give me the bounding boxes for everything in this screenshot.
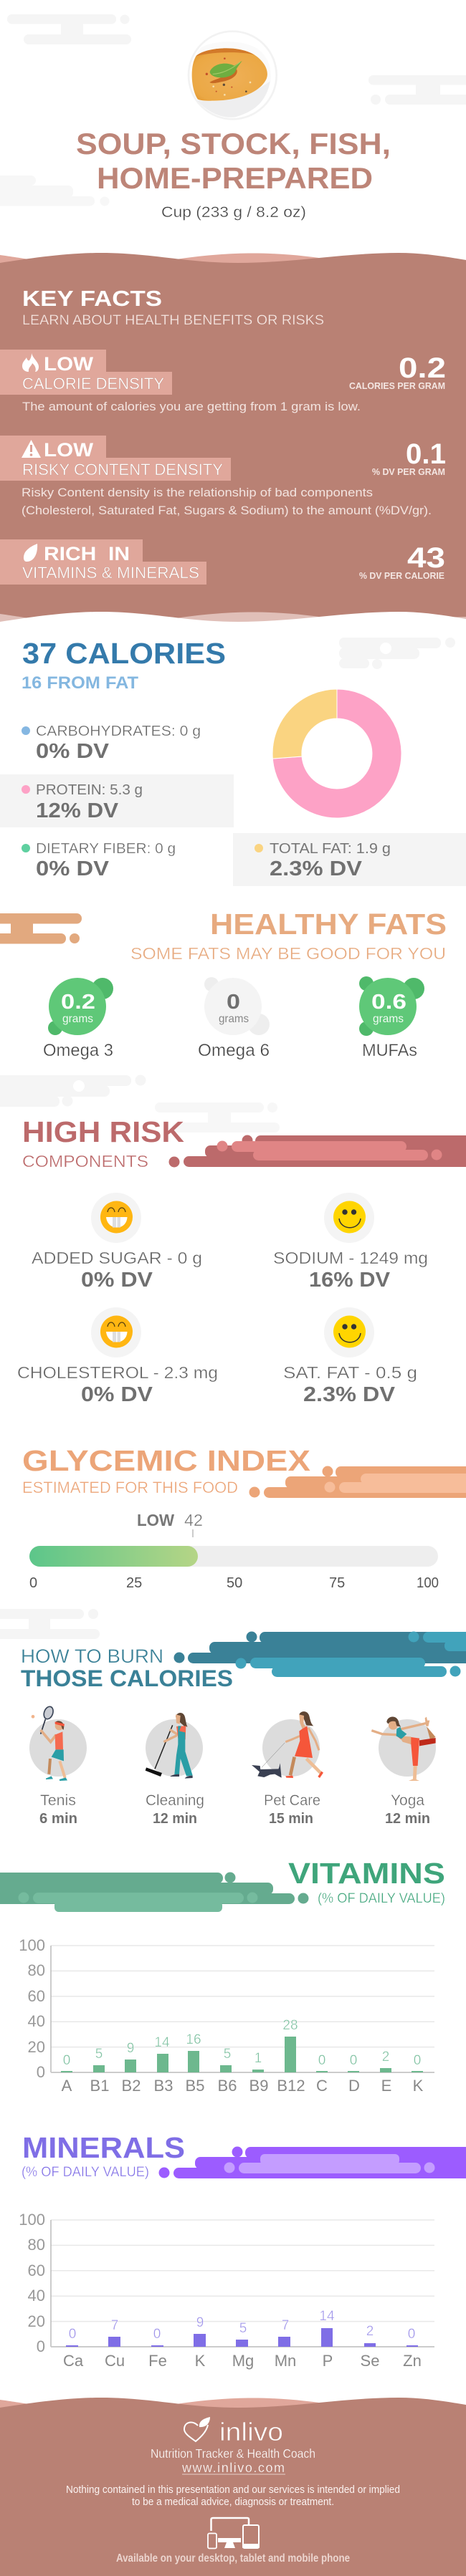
bar chart: vitamins: 9 [127,2041,134,2056]
bar chart: minerals: 20 [28,2312,45,2330]
component: sodium: SODIUM - 1249 mg [273,1249,428,1267]
decorative banner: burn calories [173,1632,466,1677]
bar chart: vitamins: 0 [63,2053,70,2068]
fat: omega 3 [43,978,113,1060]
fact: risky content density: 0.1 [406,438,446,470]
bar chart: minerals [19,2211,434,2370]
bar chart: minerals: Mn [275,2352,296,2370]
background cloud: top left [7,14,131,44]
bar chart: minerals: 80 [28,2236,45,2254]
nutrient: carbohydrates: CARBOHYDRATES: 0 g [36,724,201,739]
activity: pet care: 15 min [269,1811,313,1827]
bar chart: minerals: 0 [153,2327,161,2342]
nutrient: dietary fiber: DIETARY FIBER: 0 g [36,841,176,857]
bar chart: minerals: 40 [28,2287,45,2305]
glycemic marker label: 42 [184,1511,203,1529]
background cloud: burn calories [0,1609,100,1639]
bar chart: minerals: K [195,2352,206,2370]
glycemic index subheading: ESTIMATED FOR THIS FOOD [22,1479,238,1496]
high risk heading: HIGH RISK [22,1115,184,1148]
activity: cleaning: 12 min [153,1811,197,1827]
glycemic scale: 75 [329,1575,345,1591]
bar chart: vitamins: B3 [154,2077,173,2095]
fact: rich in vitamins and minerals: VITAMINS & MINERALS [22,564,199,582]
bar chart: vitamins: 100 [19,1936,45,1954]
healthy fats heading: HEALTHY FATS [210,908,447,941]
fact: calorie density [0,350,446,413]
bar chart: minerals: Zn [403,2352,422,2370]
glycemic scale: 0 [29,1575,37,1591]
fat: MUFAs [359,976,424,1060]
bar chart: minerals: 7 [111,2318,118,2333]
panel: calories [0,637,466,886]
title [76,127,391,195]
nutrient: total fat: 2.3% DV [270,857,363,880]
disclaimer: Nothing contained in this presentation and our services is intended or implied [66,2484,400,2496]
bar chart: vitamins: 2 [382,2049,389,2065]
fact: risky content density: LOW [44,439,94,461]
icon: flame [22,353,39,372]
fact: calorie density: LOW [44,353,94,375]
bar chart: minerals: P [323,2352,333,2370]
background cloud: top right [368,75,466,105]
minerals heading: MINERALS [22,2131,185,2164]
decorative banner: minerals [159,2146,466,2178]
serving size: Cup (233 g / 8.2 oz) [161,204,306,221]
fat: MUFAs: grams [373,1013,404,1025]
key facts heading: KEY FACTS [22,286,162,311]
component: added sugar [32,1193,202,1292]
bar chart: vitamins: 28 [282,2018,298,2033]
bar chart: minerals: 60 [28,2262,45,2279]
vitamins subheading: (% OF DAILY VALUE) [318,1891,445,1906]
nutrient: carbohydrates: 0% DV [36,740,110,763]
nutrient: protein [0,774,234,827]
disclaimer [66,2484,400,2508]
bar chart: vitamins: 14 [154,2035,170,2050]
background cloud: calories [339,638,455,669]
decorative banner: high risk [169,1135,466,1168]
tagline: Nutrition Tracker & Health Coach [151,2446,315,2461]
glycemic scale: 50 [227,1575,242,1591]
calories from fat: 16 FROM FAT [22,673,138,693]
nutrient: dietary fiber: 0% DV [36,857,110,880]
bar chart: minerals: 0 [408,2327,415,2342]
bar chart: minerals: Mg [232,2352,254,2370]
component: added sugar: 0% DV [81,1269,153,1292]
brand name: inlivo [219,2417,283,2446]
bar chart: minerals: 7 [282,2318,289,2333]
icon: warning triangle [22,440,41,458]
fact: calorie density: 0.2 [399,352,446,384]
panel: healthy fats [43,908,447,1060]
burn heading line 2: THOSE CALORIES [21,1666,233,1691]
fat: omega 6: 0 [227,991,240,1014]
bar chart: vitamins: 40 [28,2012,45,2030]
bar chart: vitamins: B1 [90,2077,109,2095]
bar chart: minerals: Ca [63,2352,84,2370]
panel: how to burn those calories [21,1645,436,1827]
fact: calorie density: CALORIE DENSITY [22,375,164,393]
bar chart: minerals: 9 [196,2315,204,2330]
fat: omega 3: 0.2 [61,991,95,1014]
activity: yoga: Yoga [391,1792,424,1809]
background cloud: high risk left [0,1075,146,1107]
bar chart: vitamins: 80 [28,1961,45,1979]
decorative banner: vitamins [0,1873,308,1912]
fact: risky content density [0,436,446,517]
bar chart: vitamins: D [348,2077,360,2095]
activity: tennis: 6 min [39,1811,77,1827]
bar chart: minerals: Fe [148,2352,167,2370]
icon: inlivo heart logo [184,2417,210,2441]
donut chart [272,689,401,818]
title: HOME-PREPARED [97,161,373,195]
healthy fats subheading: SOME FATS MAY BE GOOD FOR YOU [130,944,446,963]
bar chart: vitamins: 0 [318,2053,325,2068]
icon: devices [208,2518,260,2549]
bar chart: minerals: Se [361,2352,379,2370]
component: saturated fat: 2.3% DV [303,1383,396,1406]
glycemic scale [29,1575,439,1591]
nutrient: total fat: TOTAL FAT: 1.9 g [270,841,391,857]
fat: omega 3: grams [62,1013,93,1025]
website: www.inlivo.com [181,2461,285,2475]
glycemic marker label [137,1511,203,1537]
bar chart: vitamins: 60 [28,1987,45,2005]
component: cholesterol: CHOLESTEROL - 2.3 mg [17,1363,218,1382]
bar chart: vitamins: 16 [186,2032,201,2047]
fact: rich in vitamins and minerals [0,539,445,585]
icon: leaf [24,544,37,562]
panel: vitamins [19,1857,445,2095]
bar chart: vitamins: B5 [186,2077,204,2095]
activity: cleaning: Cleaning [146,1792,204,1809]
bar chart: vitamins: 0 [350,2053,357,2068]
disclaimer: to be a medical advice, diagnosis or treatment. [132,2496,334,2508]
activity: pet care [252,1711,323,1827]
activity: tennis [29,1705,87,1827]
minerals subheading: (% OF DAILY VALUE) [22,2165,149,2180]
fact: risky content density: % DV PER GRAM [372,466,445,477]
glycemic bar [29,1546,438,1567]
fat: MUFAs: 0.6 [371,991,406,1014]
bar chart: vitamins: B9 [249,2077,268,2095]
bar chart: minerals: 14 [319,2309,335,2324]
glycemic scale: 25 [126,1575,142,1591]
high risk subheading: COMPONENTS [22,1152,148,1171]
bar chart: vitamins [19,1936,434,2095]
fact: rich in vitamins and minerals: RICH IN [44,543,130,564]
fat: omega 6: grams [219,1013,249,1025]
fact: rich in vitamins and minerals: % DV PER CALORIE [359,570,444,581]
bar chart: vitamins: 1 [255,2051,262,2066]
fat: omega 6: Omega 6 [198,1041,270,1060]
panel: high risk components [17,1115,428,1406]
component: sodium: 16% DV [309,1269,391,1292]
bar chart: vitamins: B6 [218,2077,237,2095]
bar chart: vitamins: B12 [277,2077,305,2095]
bar chart: vitamins: K [413,2077,424,2095]
nutrient: total fat [233,833,466,886]
fact: risky content density: RISKY CONTENT DENSITY [22,461,223,479]
decorative banner: glycemic index [249,1466,466,1498]
decorative banner: healthy fats [0,913,82,944]
bar chart: minerals: Cu [105,2352,125,2370]
nutrient: protein: 12% DV [36,799,119,822]
key facts subheading: LEARN ABOUT HEALTH BENEFITS OR RISKS [22,313,324,328]
glycemic index heading: GLYCEMIC INDEX [22,1444,310,1477]
key facts bottom wave [0,602,466,630]
bar chart: vitamins: 5 [224,2047,231,2062]
nutrient: dietary fiber [22,841,176,880]
calories heading: 37 CALORIES [22,637,226,670]
background cloud: high risk centre [155,1102,280,1133]
fat: MUFAs: MUFAs [362,1041,417,1060]
fact: risky content density: Risky Content density is the relationship of bad components [22,486,373,499]
bar chart: vitamins: 20 [28,2038,45,2056]
activity: tennis: Tenis [40,1792,76,1809]
component: saturated fat: SAT. FAT - 0.5 g [283,1363,417,1382]
bar chart: vitamins: A [62,2077,72,2095]
bar chart: vitamins: B2 [122,2077,141,2095]
component: sodium [273,1193,428,1292]
glycemic scale: 100 [417,1575,439,1591]
fact: calorie density: CALORIES PER GRAM [349,380,445,391]
fact: calorie density: The amount of calories you are getting from 1 gram is low. [22,400,361,413]
bar chart: vitamins: E [381,2077,391,2095]
bar chart: vitamins: C [316,2077,328,2095]
fat: omega 6 [198,977,270,1060]
nutrient: carbohydrates [22,724,201,763]
fat: omega 3: Omega 3 [43,1041,113,1060]
title: SOUP, STOCK, FISH, [76,127,391,160]
component: added sugar: ADDED SUGAR - 0 g [32,1249,202,1267]
glycemic marker label: LOW [137,1511,174,1529]
nutrient: protein: PROTEIN: 5.3 g [36,782,143,798]
bar chart: vitamins: 0 [414,2053,421,2068]
panel: minerals [19,2131,434,2370]
panel: key facts [0,253,466,606]
component: saturated fat [283,1307,417,1406]
availability note: Available on your desktop, tablet and mobile phone [116,2552,350,2565]
fact: rich in vitamins and minerals: 43 [407,542,445,574]
bar chart: vitamins: 5 [95,2047,103,2062]
bar chart: vitamins: 0 [37,2063,45,2081]
bar chart: minerals: 2 [366,2324,374,2339]
bar chart: minerals: 5 [239,2321,247,2336]
burn heading line 1: HOW TO BURN [21,1645,163,1667]
bar chart: minerals: 100 [19,2211,45,2229]
fact: risky content density: (Cholesterol, Saturated Fat, Sugars & Sodium) to the amount (%DV/gr). [22,504,432,517]
activity: pet care: Pet Care [264,1792,320,1809]
activity: yoga [371,1717,436,1827]
background cloud: left of title [0,176,109,206]
bar chart: minerals: 0 [37,2337,45,2355]
component: cholesterol [17,1307,218,1406]
panel: footer [0,2398,466,2576]
bar chart: minerals: 0 [69,2327,76,2342]
vitamins heading: VITAMINS [288,1857,445,1890]
activity: yoga: 12 min [385,1811,430,1827]
food image: bowl of soup [189,32,277,119]
panel: glycemic index [22,1444,439,1591]
activity: cleaning [146,1713,204,1827]
component: cholesterol: 0% DV [81,1383,153,1406]
